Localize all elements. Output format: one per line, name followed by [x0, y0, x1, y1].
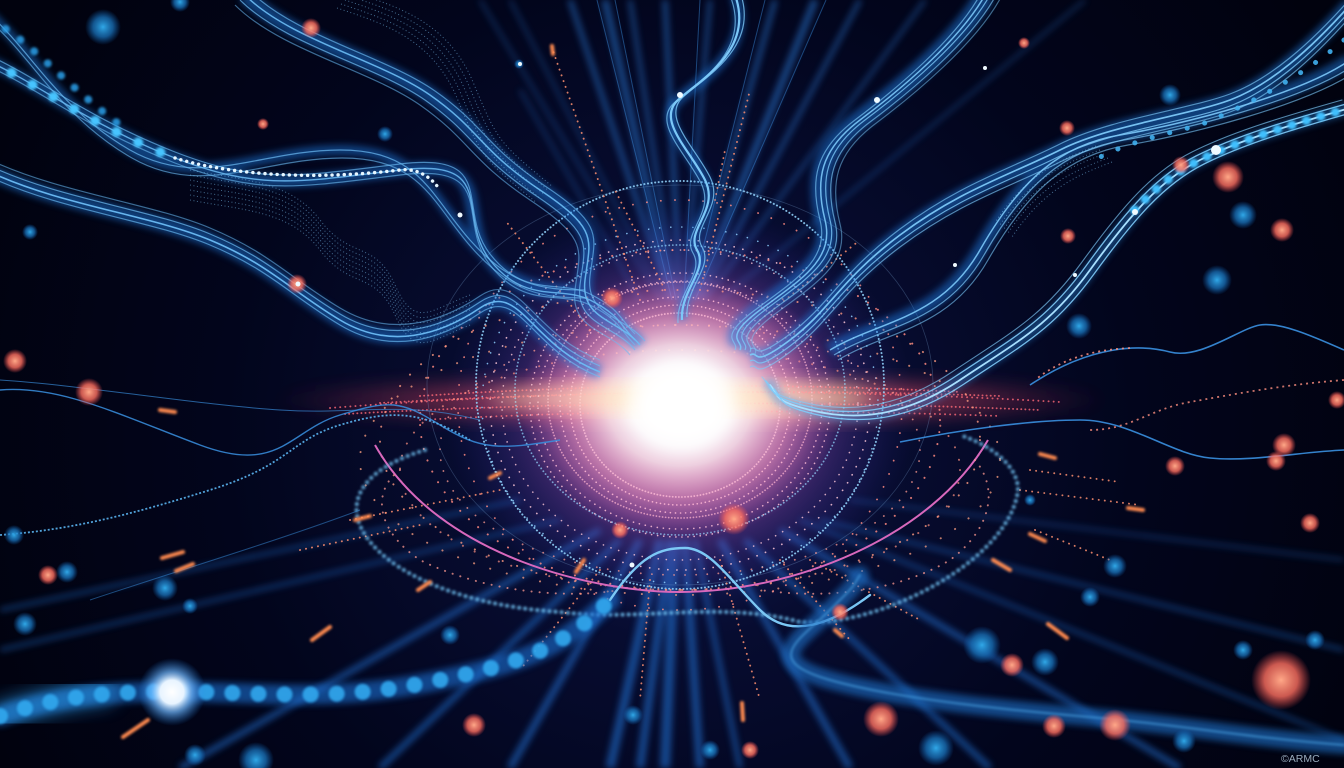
watermark: ©ARMC: [1281, 753, 1320, 765]
core burst: [490, 270, 870, 540]
center and top right strands: [667, 0, 1344, 369]
lower dotted ellipse of beads: [357, 435, 1018, 622]
bright white orb bottom left: [138, 658, 206, 726]
concentric dotted rings around the burst: [427, 181, 933, 589]
beaded strand upper left: [0, 20, 440, 190]
thick right strand: [762, 40, 1344, 420]
orange dotted rays: [300, 48, 1140, 700]
pink halo around the burst: [445, 205, 915, 615]
soft glow under the strand bundles: [0, 0, 1344, 372]
thin lower left waves: [0, 380, 560, 600]
dot field inside rings: [360, 200, 1000, 610]
thick bottom left beaded strand: [0, 548, 870, 716]
orange dashes: [123, 46, 1143, 737]
radial light rays above the burst: [480, 0, 1085, 300]
fine ray detail above the burst: [597, 0, 826, 300]
pink arc: [375, 440, 988, 592]
strand bundles from upper left: [0, 0, 645, 377]
radial light rays below the burst: [0, 500, 1344, 768]
horizontal red particle band: [270, 380, 1110, 420]
thin right waves: [900, 325, 1344, 459]
small white sparks: [296, 62, 1221, 568]
mesh ribbons: [190, 0, 1112, 343]
thick bottom right strand: [791, 575, 1344, 745]
